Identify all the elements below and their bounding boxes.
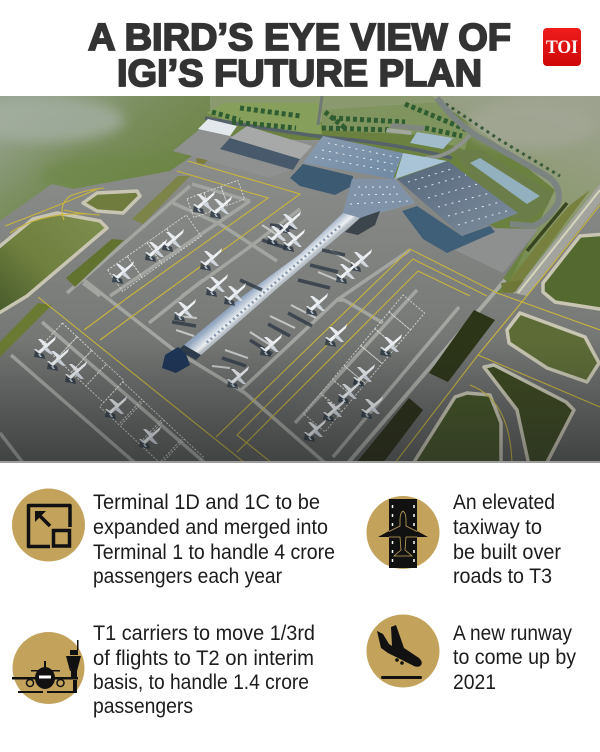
icon: TOI logo [543,28,581,66]
title: IGI’S FUTURE PLAN [117,53,482,95]
title: A BIRD’S EYE VIEW OF [88,17,511,59]
text: elevated taxiway: taxiway to [453,516,542,539]
green infield patches [0,191,600,470]
gate shadows [172,225,345,366]
parked aircraft [34,191,402,449]
side terminal buildings [173,119,540,204]
title [88,17,511,95]
apron and taxiway ground [0,129,600,463]
text: new runway: A new runway [453,622,572,645]
text: T1 carriers moving: basis, to handle 1.4 crore [93,671,309,694]
concrete forecourt [453,228,538,273]
text: elevated taxiway: An elevated [453,491,555,514]
text: elevated taxiway [453,491,561,588]
text: terminal expansion: passengers each year [93,565,282,588]
text: terminal expansion [93,491,335,588]
text: T1 carriers moving [93,622,315,718]
panel: elevated taxiway [366,491,561,588]
text: terminal expansion: Terminal 1 to handle 4 crore [93,541,335,564]
text: terminal expansion: expanded and merged into [93,516,328,539]
small service buildings [386,123,425,135]
aircraft parking stands [42,180,425,482]
icon: plane and control tower [12,632,84,704]
text: elevated taxiway: be built over [453,541,561,564]
text: T1 carriers moving: passengers [93,695,193,718]
panel: terminal expansion [12,488,335,588]
text: new runway: 2021 [453,671,496,694]
text: T1 carriers moving: T1 carriers to move 1/3rd [93,622,315,645]
right diagonal road [513,184,600,296]
perimeter road around terminal [469,150,549,206]
shadow under wings [290,164,353,195]
icon: expand square [12,488,85,562]
jet bridges at the pier [176,225,350,368]
text: T1 carriers moving: of flights to T2 on interim [93,647,314,670]
service lanes [0,184,505,463]
panel: new runway [366,614,576,694]
text: elevated taxiway: roads to T3 [453,565,552,588]
aerial render of the airport [0,96,600,482]
dark hedge beside the runway road [500,190,590,293]
text: terminal expansion: Terminal 1D and 1C to be [93,491,320,514]
main terminal [162,136,538,373]
icon: taxiway with plane [366,496,440,569]
icon: TOI logo: TOI [546,37,578,58]
panel: T1 carriers moving [12,622,315,718]
text: new runway: to come up by [453,646,576,669]
text: new runway [453,622,576,694]
icon: landing plane [366,614,440,688]
yellow taxi lines [5,161,600,463]
landscaped strip and trees behind the terminal [205,96,560,176]
